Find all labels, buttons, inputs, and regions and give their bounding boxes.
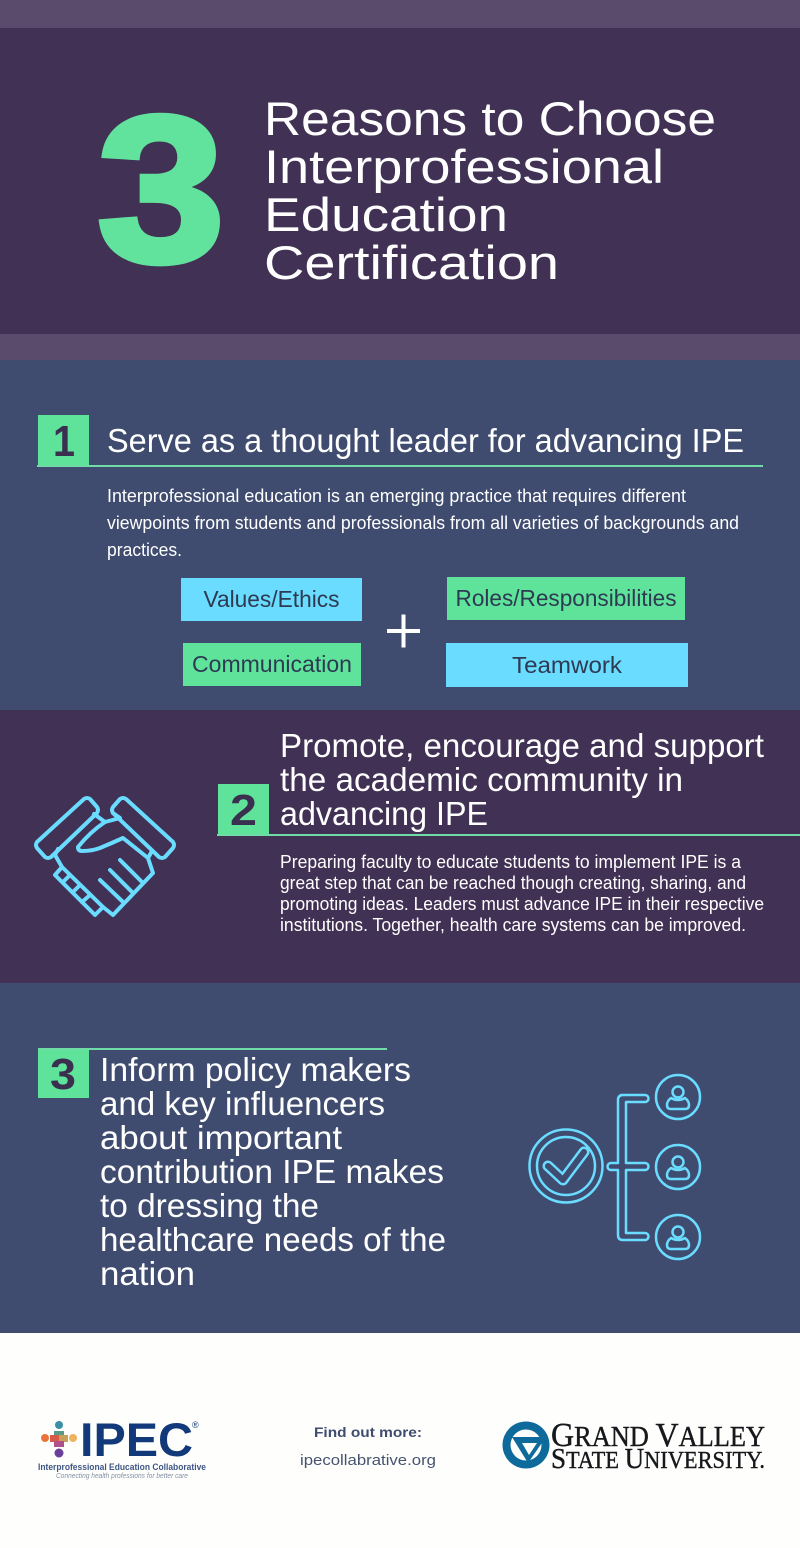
heading 1: Serve as a thought leader for advancing IPE: [107, 422, 744, 459]
number badge 1: [38, 415, 89, 466]
title: Education: [264, 188, 508, 241]
plus sign: [387, 614, 420, 648]
logo: IPEC: Interprofessional Education Collaborative: [38, 1462, 206, 1472]
logo: IPEC: ®: [192, 1420, 199, 1430]
box: Values/Ethics: [181, 578, 362, 621]
number badge 1: 1: [53, 417, 75, 466]
heading 3: contribution IPE makes: [100, 1153, 444, 1190]
icon: check and people hierarchy: [530, 1075, 700, 1259]
number badge 2: 2: [230, 786, 257, 835]
body text 1: [107, 486, 739, 560]
panel: footer: [0, 1333, 800, 1548]
panel: reason 2: [0, 710, 800, 983]
panel: reason 3: [0, 983, 800, 1333]
heading 2: [280, 727, 764, 832]
big number 3: 3: [97, 74, 225, 306]
box: Values/Ethics: Values/Ethics: [204, 586, 340, 612]
number badge 2: [218, 784, 269, 835]
panel: reason 1: [0, 360, 800, 710]
heading 3: healthcare needs of the: [100, 1221, 446, 1258]
find out more text: Find out more:: [314, 1424, 422, 1440]
number badge 3: [38, 1050, 89, 1099]
title: Reasons to Choose: [264, 92, 716, 145]
heading 3: Inform policy makers: [100, 1051, 411, 1088]
box: Teamwork: [446, 643, 688, 687]
body text 2: [280, 852, 764, 935]
title: Certification: [264, 236, 559, 289]
body text 2: great step that can be reached though creating, sharing, and: [280, 873, 746, 893]
heading 3: and key influencers: [100, 1085, 385, 1122]
heading 2: the academic community in: [280, 761, 683, 798]
logo: Grand Valley State University: GRAND VALLEY: [551, 1417, 765, 1454]
body text 1: practices.: [107, 540, 182, 560]
icon: handshake: [36, 798, 174, 915]
number badge 3: 3: [50, 1050, 76, 1099]
logo: IPEC: IPEC: [80, 1413, 193, 1466]
heading 3: about important: [100, 1119, 342, 1156]
body text 1: viewpoints from students and professionals from all varieties of backgrounds and: [107, 513, 739, 533]
logo: Grand Valley State University: [502, 1417, 765, 1475]
box: Roles/Responsibilities: Roles/Responsibilities: [456, 585, 676, 611]
title: [264, 92, 716, 289]
box: Teamwork: Teamwork: [512, 652, 622, 678]
heading 3: to dressing the: [100, 1187, 319, 1224]
logo: IPEC: [38, 1413, 206, 1480]
box: Communication: [183, 643, 361, 686]
heading 2: advancing IPE: [280, 795, 488, 832]
logo: IPEC: Connecting health professions for better care: [56, 1473, 188, 1480]
find out more text: [300, 1424, 436, 1469]
body text 1: Interprofessional education is an emerging practice that requires different: [107, 486, 686, 506]
find out more text: ipecollabrative.org: [300, 1452, 436, 1469]
body text 2: institutions. Together, health care systems can be improved.: [280, 915, 746, 935]
box: Communication: Communication: [192, 651, 352, 677]
body text 2: Preparing faculty to educate students to implement IPE is a: [280, 852, 742, 872]
heading 2: Promote, encourage and support: [280, 727, 764, 764]
title: Interprofessional: [264, 140, 664, 193]
heading 3: [100, 1051, 446, 1292]
heading 3: nation: [100, 1255, 195, 1292]
logo: Grand Valley State University: STATE UNIVERSITY.: [551, 1443, 765, 1475]
panel: header: [0, 0, 800, 360]
box: Roles/Responsibilities: [447, 577, 685, 620]
body text 2: promoting ideas. Leaders must advance IPE in their respective: [280, 894, 764, 914]
